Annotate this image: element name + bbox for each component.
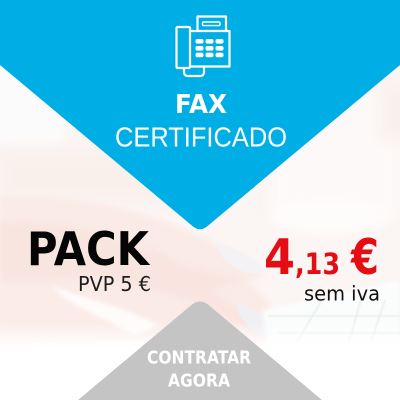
price digit 4: 4	[264, 229, 295, 286]
button label: CONTRATAR: CONTRATAR	[147, 348, 251, 368]
price decimals ,13: ,13	[295, 247, 340, 281]
text: sem iva: sem iva	[304, 282, 380, 306]
blue chevron panel	[0, 0, 400, 229]
fingernails	[217, 243, 265, 274]
heading: FAX: FAX	[175, 90, 227, 120]
price: 4,13 euro	[264, 229, 379, 286]
text: PACK: PACK	[27, 222, 151, 276]
button label: AGORA: AGORA	[168, 372, 230, 392]
keyboard	[262, 280, 400, 350]
icon: fax machine	[176, 16, 230, 76]
fade to white at bottom	[0, 322, 400, 348]
heading: CERTIFICADO: CERTIFICADO	[115, 122, 287, 152]
price euro sign: €	[350, 229, 379, 286]
button: contratar agora	[78, 302, 322, 400]
text: PVP 5 euro: PVP 5 €	[78, 272, 151, 296]
hand	[0, 196, 279, 345]
